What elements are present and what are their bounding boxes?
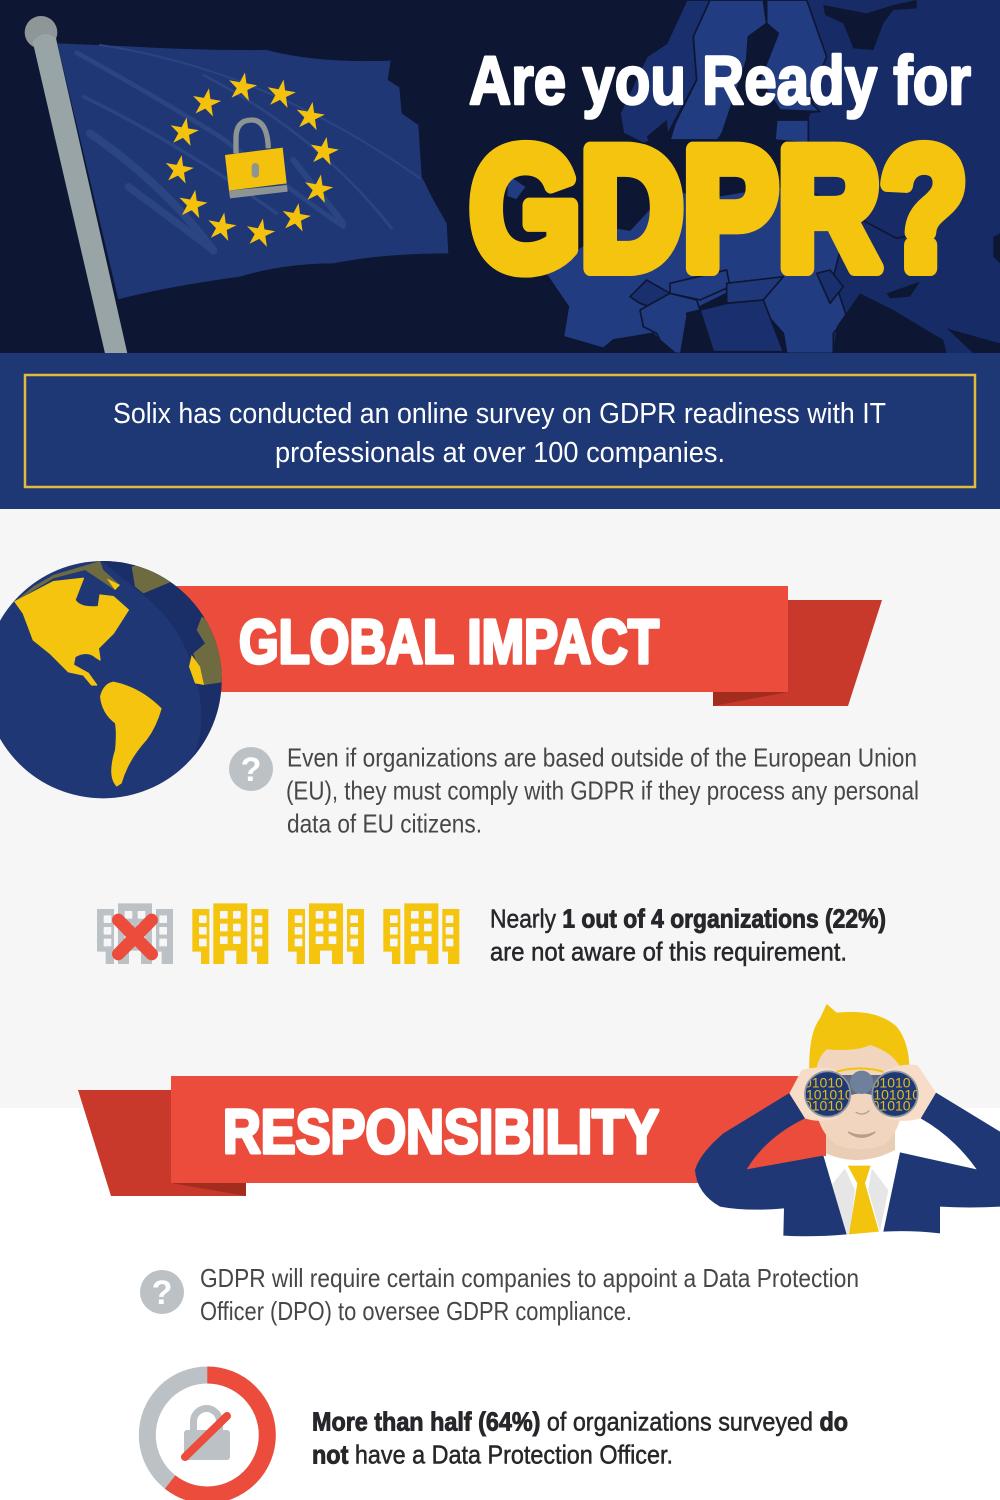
- heading: global impact: GLOBAL IMPACT: [239, 608, 659, 677]
- text: EU compliance: [286, 742, 919, 838]
- stat: 22 percent: are not aware of this requirement.: [490, 936, 847, 966]
- binoculars: 01010: [872, 1075, 911, 1091]
- binoculars: 01010: [872, 1098, 911, 1114]
- panel: survey intro: [0, 353, 1000, 509]
- icon: question mark: [140, 1270, 184, 1314]
- jacket: [695, 1093, 1000, 1236]
- panel: global impact: [0, 560, 919, 966]
- icon: crossed-out padlock: [184, 1409, 230, 1460]
- binoculars: 101010: [806, 1087, 853, 1103]
- icons: 1 of 4 buildings: [97, 903, 459, 964]
- illustration: man with binoculars: [695, 1004, 1000, 1236]
- intro text: professionals at over 100 companies.: [275, 437, 725, 469]
- stars: [163, 70, 341, 248]
- icon: globe: [0, 560, 233, 798]
- chart: 64 percent donut: [147, 1375, 267, 1495]
- EU flag: [57, 43, 448, 299]
- text: EU compliance: data of EU citizens.: [287, 808, 482, 838]
- text: DPO requirement: Officer (DPO) to oversee GDPR compliance.: [200, 1296, 632, 1326]
- text: DPO requirement: GDPR will require certain companies to appoint a Data Protection: [200, 1263, 859, 1293]
- hands: [789, 1065, 936, 1121]
- stat: 64 percent: More than half (64%) of organizations surveyed do: [312, 1406, 848, 1436]
- icon: question mark: ?: [152, 1274, 172, 1312]
- binoculars: 101010: [873, 1087, 920, 1103]
- stat: 22 percent: Nearly 1 out of 4 organizations (22%): [490, 904, 886, 934]
- stat: 64 percent: not have a Data Protection Officer.: [312, 1440, 673, 1470]
- heading: responsibility: RESPONSIBILITY: [223, 1098, 659, 1167]
- shirt and tie: [823, 1152, 900, 1234]
- map of Europe: [500, 0, 1000, 353]
- icon: question mark: [229, 747, 273, 791]
- padlock: [225, 120, 288, 198]
- intro text: Solix has conducted an online survey on GDPR readiness with IT: [113, 398, 886, 430]
- stat: 22 percent: [490, 904, 886, 966]
- banner: global impact: [175, 586, 882, 706]
- icon: yellow buildings: [192, 903, 459, 964]
- banner: responsibility: [78, 1076, 826, 1196]
- binoculars: 01010: [804, 1075, 843, 1091]
- icon: crossed-out building: [97, 903, 173, 964]
- binoculars: [804, 1071, 920, 1117]
- panel: header: [0, 0, 1000, 353]
- intro text: [113, 398, 886, 469]
- flag pole: [25, 16, 127, 353]
- text: DPO requirement: [200, 1263, 859, 1326]
- stat: 64 percent: [312, 1406, 848, 1470]
- binoculars: 01010: [804, 1098, 843, 1114]
- icon: question mark: ?: [241, 751, 261, 789]
- panel: responsibility: [78, 1004, 1000, 1495]
- text: EU compliance: Even if organizations are based outside of the European Union: [287, 742, 917, 772]
